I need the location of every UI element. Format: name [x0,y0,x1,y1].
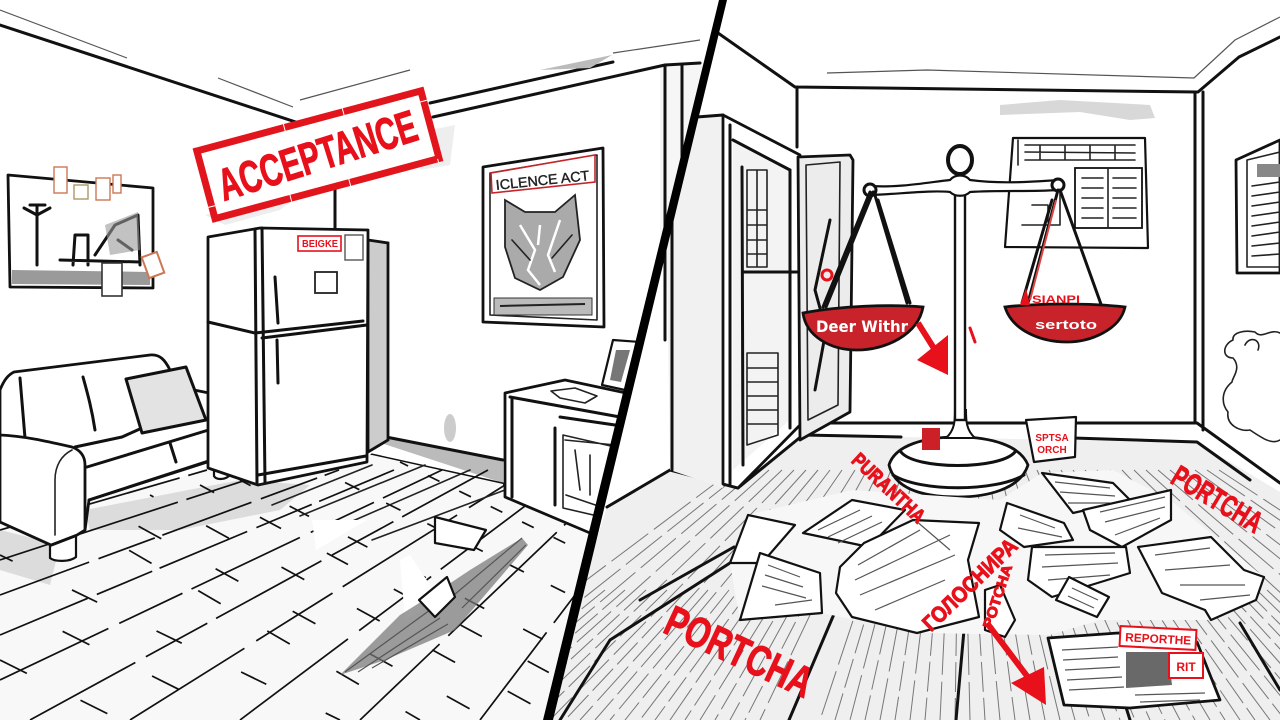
pile of papers [730,470,1264,637]
bulletin board [1005,138,1148,248]
red label top of pile: PURANTHA [847,449,929,528]
poster title [491,155,595,193]
newspaper red box: RIT [1176,660,1196,674]
newspaper red headline: REPORTHE [1125,630,1192,648]
diagonal divider [543,0,727,720]
lower middle paper [1028,547,1130,597]
red arrow lower [987,623,1046,705]
scribble smear [340,538,528,675]
wall picture with notes [8,167,164,296]
right edge frame [1236,140,1280,273]
left pan: Deer Withr [816,317,908,336]
red label lower centre: POTCHA [979,563,1015,630]
right pan: SIANPI [1032,294,1080,306]
poster title: ICLENCE ACT [495,167,590,193]
sofa [0,355,241,561]
newspaper red headline [1120,626,1196,650]
middle paper [1000,503,1073,547]
far left paper [730,515,795,563]
right pan: sertoto [1035,317,1097,332]
stamp: acceptance: ACCEPTANCE [212,100,423,211]
torn paper [419,577,455,617]
back left paper [803,500,905,547]
panel: left room [0,10,720,720]
newspaper front [1048,626,1220,708]
stamp: acceptance [197,91,439,219]
fridge note label [298,236,341,251]
newspaper card near base [1026,417,1076,462]
far right papers [1138,537,1264,620]
paper on floor [435,517,486,550]
newspaper card near base: ORCH [1037,445,1067,456]
panel: right room [553,16,1280,720]
fridge note label: BEIGKE [302,239,338,250]
left room walls and ceiling [0,10,720,484]
cushion [126,367,206,433]
open door [798,155,853,440]
wooden floor [553,436,1280,720]
refrigerator [208,228,388,485]
newspaper red box [1169,653,1203,678]
down arrow left [917,323,948,375]
scale base [889,410,1028,497]
top right paper [1042,473,1130,513]
right edge ornament [1223,331,1280,442]
square paper [1056,577,1109,617]
bookcase [665,68,853,488]
desk [505,340,640,540]
red label centre: ГОЛОСНИРА [917,533,1022,636]
tiled floor [0,455,574,720]
balance scale [803,146,1125,497]
central crumple [836,520,979,633]
poster [483,148,604,327]
lower left paper [740,553,822,620]
right stacked paper [1083,490,1171,547]
newspaper card near base: SPTSA [1035,433,1069,444]
right pan [1005,288,1125,342]
left pan [803,306,923,350]
right room walls [607,17,1280,507]
